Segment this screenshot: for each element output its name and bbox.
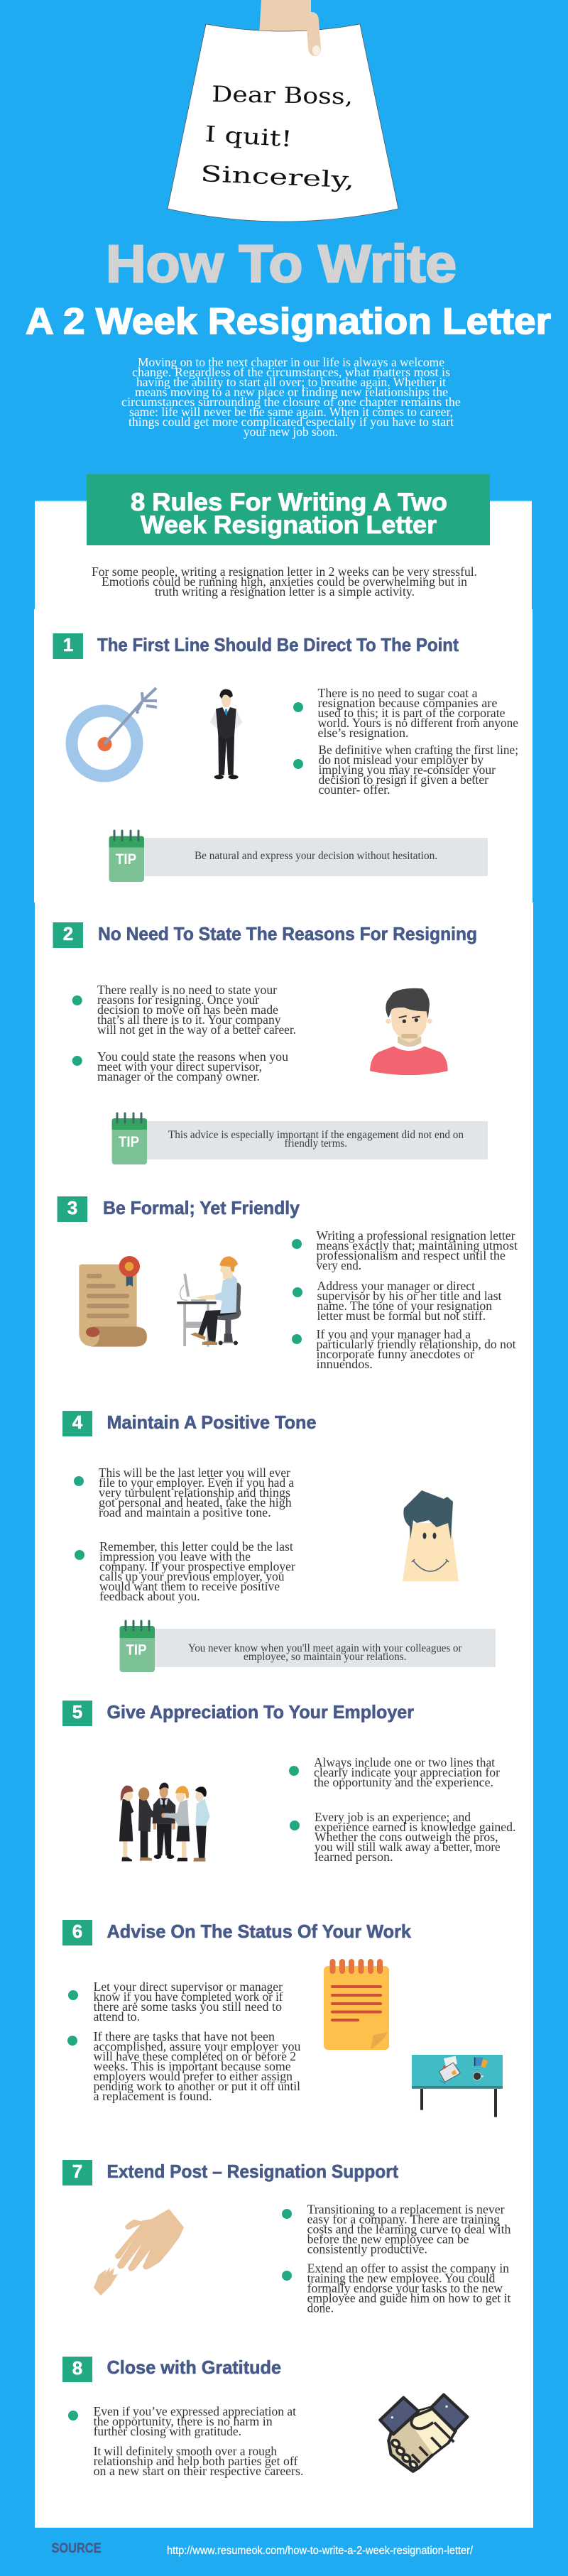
section 5 heading xyxy=(62,1701,414,1726)
heading text 3: Be Formal; Yet Friendly xyxy=(103,1197,300,1218)
tip 2: friendly terms. xyxy=(284,1137,347,1150)
bullets and text: section 8: the opportunity, there is no harm in xyxy=(94,2414,273,2428)
bullets and text: section 5: Always include one or two lines that xyxy=(314,1755,495,1769)
tip 2 xyxy=(112,1113,488,1164)
tip 4 xyxy=(119,1621,496,1672)
heading banner: 8 rules xyxy=(87,474,490,545)
bullets and text: section 4: very turbulent relationship and things xyxy=(99,1485,290,1500)
bullets and text: section 3: means exactly that; maintaining utmost xyxy=(317,1238,518,1252)
icon: handshake xyxy=(380,2395,467,2472)
heading text 6: Advise On The Status Of Your Work xyxy=(106,1921,412,1942)
bullets and text: section 2: You could state the reasons when you xyxy=(97,1049,288,1064)
bullets and text: section 3: If you and your manager had a xyxy=(317,1327,471,1341)
number badge 1: 1 xyxy=(63,634,73,655)
bullets and text: section 7: costs and the learning curve to deal with xyxy=(307,2222,511,2237)
bullets and text: section 2: will not get in the way of a better career. xyxy=(97,1022,296,1037)
title xyxy=(26,234,551,342)
bullets and text: section 5: experience earned is knowledge gained. xyxy=(315,1820,515,1834)
number badge 4: 4 xyxy=(72,1412,83,1433)
icon: finger xyxy=(306,12,321,56)
bullets and text: section 4 xyxy=(74,1466,295,1603)
bullets and text: section 6 xyxy=(67,1980,301,2103)
bullets and text: section 4: company. If your prospective employer xyxy=(99,1559,295,1573)
bullets and text: section 2: manager or the company owner. xyxy=(97,1069,260,1084)
bullets and text: section 4: file to your employer. Even if you had a xyxy=(99,1475,294,1490)
number badge 3: 3 xyxy=(67,1197,77,1218)
icon: hand palm xyxy=(259,0,311,36)
letter text: Sincerely, xyxy=(200,161,355,193)
bullets and text: section 5: clearly indicate your appreciation for xyxy=(314,1765,500,1779)
bullets and text: section 8: further closing with gratitude. xyxy=(94,2424,241,2438)
tip 4: employee, so maintain your relations. xyxy=(244,1651,406,1663)
bullets and text: section 5: you will still walk away a better, more xyxy=(315,1840,501,1854)
source label: SOURCE xyxy=(51,2541,101,2556)
woman with orange hair xyxy=(164,1786,190,1861)
large hand xyxy=(115,2209,184,2271)
bullets and text: section 3: supervisor by his or her title and last xyxy=(317,1289,502,1303)
heading banner: 8 rules: 8 Rules For Writing A Two xyxy=(131,489,447,516)
bullets and text: section 2: that’s all there is to it. Your company xyxy=(97,1013,281,1027)
text block: rules intro: truth writing a resignation letter is a simple activity. xyxy=(155,584,415,599)
bullets and text: section 3: innuendos. xyxy=(317,1357,373,1371)
bullets and text: section 1: implying you may re-consider your xyxy=(318,763,496,777)
bullets and text: section 2: reasons for resigning. Once your xyxy=(97,993,259,1007)
icon: man in red shirt xyxy=(370,988,448,1075)
bullets and text: section 7: formally endorse your tasks to the new xyxy=(307,2281,503,2295)
bullets and text: section 8: It will definitely smooth over a rough xyxy=(94,2444,277,2458)
bullets and text: section 5: Whether the cons outweigh the pros, xyxy=(315,1830,498,1844)
section 4 heading xyxy=(62,1411,317,1436)
bullets and text: section 5 xyxy=(289,1755,515,1864)
icon: businessman xyxy=(210,689,242,779)
man in center xyxy=(153,1783,175,1859)
bullets and text: section 8 xyxy=(68,2404,304,2478)
intro paragraph: means moving to a new place or finding new relationships the xyxy=(135,385,448,399)
icon: tip notepad: TIP xyxy=(126,1642,146,1659)
text block: rules intro: Emotions could be running high, anxieties could be overwhelming but in xyxy=(102,574,467,589)
source footer xyxy=(51,2541,474,2557)
bullets and text: section 4: would want them to receive positive xyxy=(99,1579,280,1593)
tip 1: Be natural and express your decision without hesitation. xyxy=(195,850,437,862)
number badge 5: 5 xyxy=(72,1701,82,1723)
icon: five colleagues shaking hands xyxy=(119,1783,210,1862)
number badge 7: 7 xyxy=(72,2161,82,2182)
tip 2: This advice is especially important if the engagement did not end on xyxy=(168,1129,464,1141)
bullets and text: section 6: a replacement is found. xyxy=(94,2089,212,2103)
number badge 6: 6 xyxy=(72,1921,82,1942)
source url: http://www.resumeok.com/how-to-write-a-2-week-resignation-letter/ xyxy=(167,2545,474,2557)
heading text 8: Close with Gratitude xyxy=(106,2357,281,2378)
bullets and text: section 4: got personal and heated, take the high xyxy=(99,1495,292,1510)
bullets and text: section 8: on a new start on their respective careers. xyxy=(94,2464,304,2478)
bullets and text: section 1: resignation because companies are xyxy=(318,696,498,710)
bullets and text: section 4: road and maintain a positive tone. xyxy=(99,1505,271,1519)
icon: tip notepad xyxy=(119,1621,155,1672)
bullets and text: section 3: name. The tone of your resignation xyxy=(317,1299,492,1313)
icon: person working at desk xyxy=(177,1256,241,1347)
intro paragraph: circumstances surrounding the closure of one chapter remains the xyxy=(121,395,461,409)
intro paragraph: having the ability to start all over; to breathe again. Whether it xyxy=(136,375,446,389)
section 3 heading xyxy=(58,1196,300,1222)
man in dark suit with bald head xyxy=(138,1787,162,1861)
letter text xyxy=(200,82,355,193)
section 2 heading xyxy=(53,922,477,948)
bullets and text: section 7 xyxy=(282,2203,511,2315)
intro paragraph: same: life will never be the same again. When it comes to career, xyxy=(129,405,453,419)
bullets and text: section 4: Remember, this letter could be the last xyxy=(99,1539,293,1554)
bullets and text: section 2: decision to move on has been made xyxy=(97,1003,278,1017)
bullets and text: section 1 xyxy=(293,686,518,797)
bullets and text: section 1: Be definitive when crafting the first line; xyxy=(318,743,518,757)
icon: target with arrow xyxy=(72,688,157,776)
icon: yellow notepad xyxy=(324,1962,389,2050)
bullets and text: section 3: incorporate funny anecdotes or xyxy=(317,1347,474,1361)
bullets and text: section 1: There is no need to sugar coat a xyxy=(318,686,478,700)
number badge 6 xyxy=(62,1920,92,1945)
bullets and text: section 7: before the new employee can be xyxy=(307,2232,469,2247)
number badge 8: 8 xyxy=(72,2357,82,2379)
letter text: Dear Boss, xyxy=(212,82,353,109)
icon: tip notepad xyxy=(112,1113,147,1164)
bullets and text: section 6: pending work to another or put it off until xyxy=(94,2079,300,2093)
bullets and text: section 6: If there are tasks that have not been xyxy=(94,2029,275,2043)
bullets and text: section 6: will have these completed on or before 2 xyxy=(94,2049,296,2063)
small hand xyxy=(94,2267,118,2296)
bullets and text: section 3: Address your manager or direct xyxy=(317,1279,475,1293)
bullets and text: section 4: impression you leave with the xyxy=(99,1549,251,1563)
intro paragraph: your new job soon. xyxy=(244,425,338,439)
bullets and text: section 2: There really is no need to state your xyxy=(97,983,277,997)
intro paragraph: Moving on to the next chapter in our life is always a welcome xyxy=(138,355,444,369)
number badge 8 xyxy=(62,2357,92,2382)
bullets and text: section 5: Every job is an experience; and xyxy=(315,1810,471,1824)
title: How To Write xyxy=(106,234,457,293)
icon: large hand reaching small hand xyxy=(94,2209,184,2296)
tip 4: You never know when you'll meet again with your colleagues or xyxy=(188,1642,462,1654)
heading text 4: Maintain A Positive Tone xyxy=(106,1412,317,1433)
letter paper xyxy=(168,24,398,222)
intro paragraph: things could get more complicated especially if you have to start xyxy=(129,415,454,429)
bullets and text: section 1: used to this; it is part of the corporate xyxy=(318,706,506,720)
bullets and text: section 7: consistently productive. xyxy=(307,2242,427,2256)
bullets and text: section 6: there are some tasks you still need to xyxy=(94,1999,282,2014)
bullets and text: section 3: letter must be formal but not stiff. xyxy=(317,1309,486,1323)
bullets and text: section 4: feedback about you. xyxy=(99,1589,200,1603)
bullets and text: section 6: accomplished, assure your employer you xyxy=(94,2039,301,2053)
intro paragraph xyxy=(121,355,461,439)
bullets and text: section 2: meet with your direct supervisor, xyxy=(97,1059,262,1074)
bullets and text: section 2 xyxy=(72,983,296,1084)
icon: tip notepad: TIP xyxy=(119,1134,139,1150)
bullets and text: section 3: professionalism and respect until the xyxy=(317,1248,506,1262)
bullets and text: section 5: the opportunity and the experience. xyxy=(314,1775,493,1789)
number badge 2: 2 xyxy=(63,923,73,944)
bullets and text: section 3: Writing a professional resignation letter xyxy=(317,1228,515,1243)
bullets and text: section 1: world. Yours is no different from anyone xyxy=(318,716,518,730)
section 7 heading xyxy=(62,2160,398,2185)
icon: scroll certificate xyxy=(79,1256,147,1347)
bullets and text: section 6: employers would prefer to either assign xyxy=(94,2069,293,2083)
bullets and text: section 7: Transitioning to a replacement is never xyxy=(307,2203,505,2217)
bullets and text: section 6: know if you have completed work or if xyxy=(94,1990,283,2004)
number badge 2 xyxy=(53,922,83,948)
number badge 1 xyxy=(53,633,83,659)
letter text: I quit! xyxy=(204,121,293,152)
bullets and text: section 4: calls up your previous employer, you xyxy=(99,1569,285,1583)
number badge 3 xyxy=(58,1196,87,1222)
section 6 heading xyxy=(62,1920,412,1945)
intro paragraph: change. Regardless of the circumstances, what matters most is xyxy=(132,365,450,379)
text block: rules intro: For some people, writing a resignation letter in 2 weeks can be very stressful. xyxy=(92,564,477,579)
heading text 7: Extend Post – Resignation Support xyxy=(106,2161,398,2182)
bullets and text: section 1: do not mislead your employer by xyxy=(318,753,484,767)
heading text 2: No Need To State The Reasons For Resigning xyxy=(98,923,477,944)
bullets and text: section 3: very end. xyxy=(317,1258,361,1272)
icon: smiling face xyxy=(403,1490,459,1581)
header illustration: hand holding letter xyxy=(168,0,398,222)
bullets and text: section 1: counter- offer. xyxy=(318,782,390,797)
heading text 1: The First Line Should Be Direct To The Point xyxy=(97,634,459,655)
bullets and text: section 7: easy for a company. There are training xyxy=(307,2212,500,2227)
number badge 4 xyxy=(62,1411,92,1436)
bullets and text: section 8: relationship and help both parties get off xyxy=(94,2454,298,2468)
icon: teal desk with items xyxy=(412,2055,503,2117)
section 8 heading xyxy=(62,2357,281,2382)
panel: white content background xyxy=(34,501,533,2528)
icon: tip notepad xyxy=(109,831,144,882)
bullets and text: section 6: Let your direct supervisor or manager xyxy=(94,1980,283,1994)
bullets and text: section 4: This will be the last letter you will ever xyxy=(99,1466,290,1480)
woman with red hair xyxy=(119,1786,133,1861)
icon: tip notepad: TIP xyxy=(116,851,136,868)
number badge 7 xyxy=(62,2160,92,2185)
bullets and text: section 3 xyxy=(292,1228,518,1371)
title: A 2 Week Resignation Letter xyxy=(26,301,551,342)
bullets and text: section 7: done. xyxy=(307,2301,334,2315)
bullets and text: section 7: training the new employee. You could xyxy=(307,2271,496,2285)
number badge 5 xyxy=(62,1701,92,1726)
bullets and text: section 1: decision to resign if given a better xyxy=(318,773,488,787)
bullets and text: section 3: particularly friendly relationship, do not xyxy=(317,1337,516,1351)
bullets and text: section 6: attend to. xyxy=(94,2009,140,2024)
bullets and text: section 1: else’s resignation. xyxy=(318,726,409,740)
bullets and text: section 5: learned person. xyxy=(315,1850,393,1864)
heading text 5: Give Appreciation To Your Employer xyxy=(106,1701,414,1723)
man in blue shirt xyxy=(193,1786,210,1862)
text block: rules intro xyxy=(92,564,477,599)
bullets and text: section 7: Extend an offer to assist the company in xyxy=(307,2261,509,2275)
bullets and text: section 8: Even if you’ve expressed appreciation at xyxy=(94,2404,296,2418)
section 1 heading xyxy=(53,633,459,659)
bullets and text: section 6: weeks. This is important because some xyxy=(94,2059,291,2073)
tip 1 xyxy=(109,831,488,882)
heading banner: 8 rules: Week Resignation Letter xyxy=(141,511,437,539)
bullets and text: section 7: employee and guide him on how to get it xyxy=(307,2291,511,2305)
